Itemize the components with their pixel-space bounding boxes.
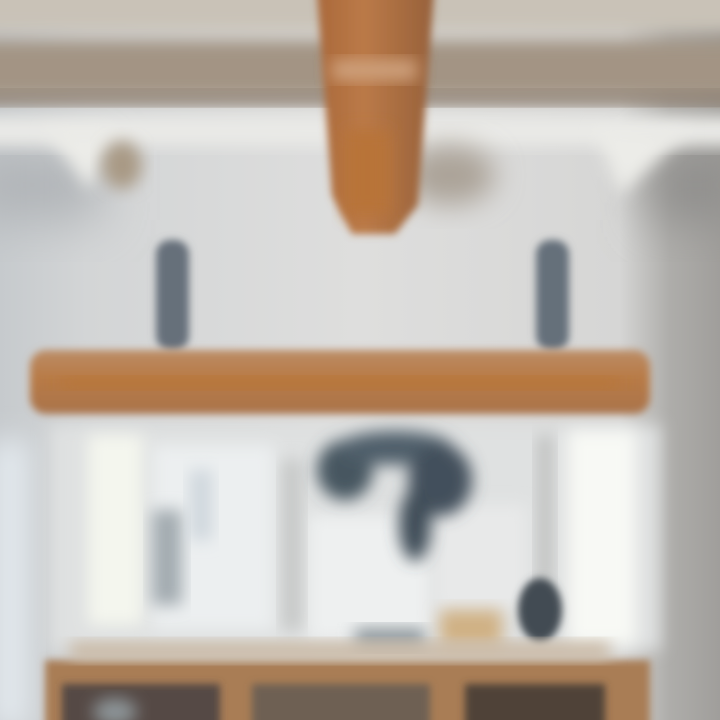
right hanging strap: [536, 240, 569, 350]
lower wooden cabinet: [45, 642, 650, 720]
beam shadow: [405, 145, 495, 205]
white hanging cloths: [50, 425, 660, 650]
hanging wooden shelf: [30, 350, 650, 414]
dark round object: [518, 578, 562, 642]
dark hanging garment: [317, 431, 472, 561]
small items on lower shelf: [355, 610, 502, 648]
vertical wooden beam: [316, 0, 435, 234]
ceiling band: [0, 0, 720, 146]
left hanging strap: [156, 240, 189, 350]
ceiling brackets: [45, 130, 690, 195]
